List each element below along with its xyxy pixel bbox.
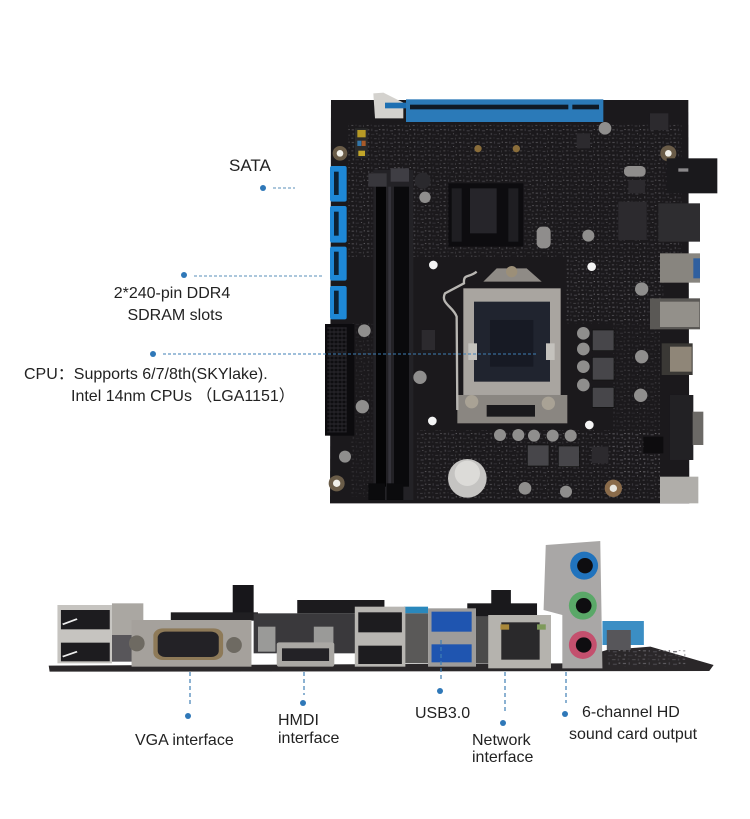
dual usb middle <box>355 607 405 667</box>
dimm slots <box>368 168 413 500</box>
usb label: USB3.0 <box>415 705 470 722</box>
rear components <box>171 585 537 663</box>
ddr4 leader <box>181 272 322 278</box>
sound label <box>569 704 698 743</box>
mounting holes <box>428 261 596 429</box>
rj45 network port <box>488 615 551 668</box>
crystals <box>537 166 646 248</box>
pc chips <box>422 113 668 463</box>
sound label: 6-channel HD <box>582 704 680 721</box>
hdmi leader <box>300 672 306 706</box>
hdmi label: interface <box>278 730 339 747</box>
atx power connector <box>325 324 354 436</box>
network label <box>472 732 533 766</box>
power chokes <box>527 330 614 467</box>
blue header <box>602 621 644 650</box>
audio bracket <box>544 541 602 668</box>
cpu label: Intel 14nm CPUs （LGA1151） <box>71 387 295 405</box>
vga leader <box>185 672 191 719</box>
sata leader <box>260 185 295 191</box>
network label: Network <box>472 732 532 749</box>
ddr4 label: SDRAM slots <box>127 307 223 324</box>
pcie slot <box>373 93 603 122</box>
cpu label <box>24 366 295 405</box>
usb leader <box>437 640 443 694</box>
pcb edge <box>49 647 714 672</box>
right side ports <box>643 158 717 503</box>
ddr4 label <box>114 285 230 324</box>
hdmi label <box>278 712 339 747</box>
cmos battery <box>448 459 487 498</box>
header colored pins <box>355 128 368 158</box>
cpu leader <box>150 351 538 357</box>
vga label: VGA interface <box>135 732 234 749</box>
hdmi label: HMDI <box>278 712 319 729</box>
vga connector <box>129 620 251 667</box>
sata label group <box>229 156 295 191</box>
ddr4 label: 2*240-pin DDR4 <box>114 285 230 302</box>
io panel side view <box>49 541 714 672</box>
network leader <box>500 672 506 726</box>
cpu socket <box>444 266 567 423</box>
heatsink <box>448 183 523 247</box>
pcb <box>330 100 689 503</box>
cpu label: CPU：Supports 6/7/8th(SKYlake). <box>24 366 268 383</box>
sound label: sound card output <box>569 726 698 743</box>
capacitors <box>339 122 648 498</box>
sata ports <box>330 166 347 319</box>
hdmi connector <box>277 642 334 667</box>
network label: interface <box>472 749 533 766</box>
motherboard top view <box>325 93 717 503</box>
dual usb left <box>57 603 143 663</box>
usb 3.0 blue <box>428 608 476 667</box>
sata label: SATA <box>229 156 272 175</box>
sound leader <box>562 672 568 717</box>
